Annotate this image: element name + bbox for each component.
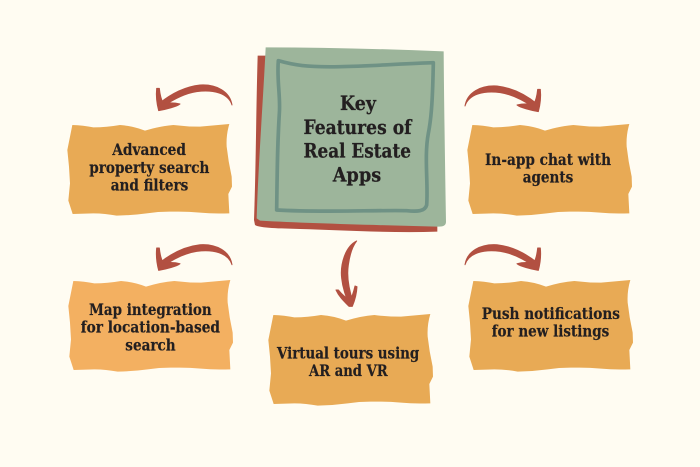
label bbox=[276, 343, 419, 380]
label: property search bbox=[89, 158, 209, 177]
label: search bbox=[125, 336, 176, 355]
arrow: to advanced property search bbox=[156, 85, 232, 111]
arrow: to map integration bbox=[156, 245, 232, 270]
label: Map integration bbox=[89, 300, 212, 319]
label: Virtual tours using bbox=[276, 343, 419, 362]
label: Advanced bbox=[111, 140, 186, 159]
label: Push notifications bbox=[482, 304, 620, 323]
title bbox=[304, 91, 413, 186]
panel: advanced property search bbox=[67, 124, 232, 216]
panel: virtual tours bbox=[268, 314, 433, 406]
arrow: to virtual tours bbox=[336, 241, 357, 306]
panel shadow: red back sheet bbox=[254, 56, 437, 232]
arrow: to in-app chat bbox=[465, 86, 541, 112]
label bbox=[89, 140, 209, 195]
central panel: key features bbox=[254, 47, 446, 232]
panel inner hand-drawn border bbox=[277, 61, 433, 211]
panel: push notifications bbox=[468, 280, 633, 372]
title: Key bbox=[340, 91, 377, 115]
label bbox=[482, 304, 620, 341]
arrow: to push notifications bbox=[465, 245, 541, 270]
title: Features of bbox=[304, 115, 413, 139]
label: AR and VR bbox=[308, 361, 388, 380]
title: Real Estate bbox=[304, 139, 411, 163]
panel: map integration bbox=[68, 280, 233, 372]
title: Apps bbox=[332, 162, 381, 186]
label: In-app chat with bbox=[485, 150, 611, 169]
label: agents bbox=[523, 168, 574, 187]
label: for new listings bbox=[492, 322, 610, 341]
label: and filters bbox=[111, 176, 189, 195]
label bbox=[81, 300, 220, 355]
panel face: green sheet bbox=[257, 47, 446, 227]
label: for location-based bbox=[81, 318, 220, 337]
label bbox=[485, 150, 611, 187]
panel: in-app chat bbox=[467, 124, 632, 216]
